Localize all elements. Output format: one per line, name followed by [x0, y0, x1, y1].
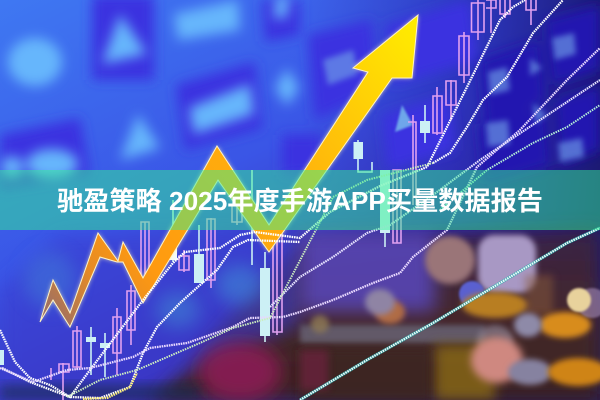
- background: blurred bokeh lights: [300, 235, 600, 400]
- line: teal moving average: [300, 228, 600, 400]
- line: yellow moving average: [83, 373, 137, 399]
- title: 驰盈策略 2025年度手游APP买量数据报告: [57, 186, 543, 216]
- line: green moving average: [67, 105, 600, 397]
- banner: translucent teal title band: [0, 170, 600, 230]
- line: lavender moving average upper: [270, 80, 600, 307]
- arrow: rising orange-yellow trend arrow: [40, 15, 418, 327]
